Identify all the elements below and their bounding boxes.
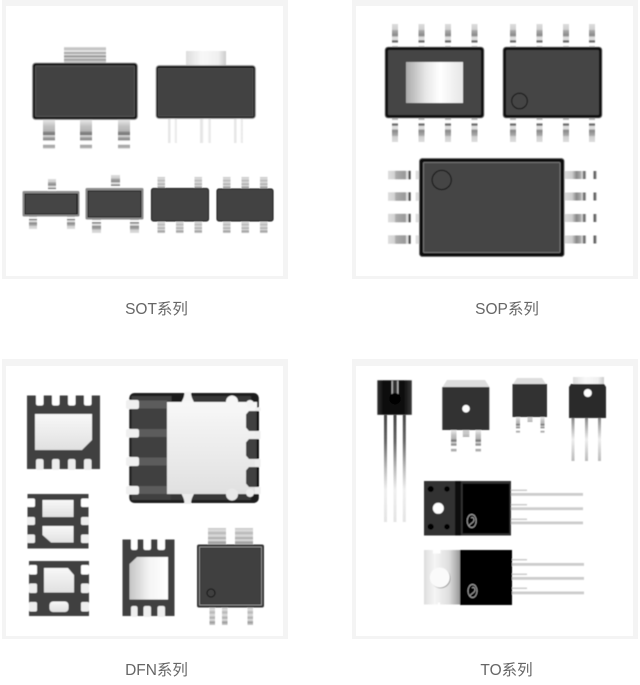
chip: SOT large with cap [156,51,256,143]
panel: TO series [352,359,638,639]
chip: SOT large with tab [32,47,138,149]
chip: SOP with pin marker [503,24,602,142]
chip: SOT five-pin [152,177,208,233]
chip: SOT small three-pin A [22,179,80,229]
label: SOP series: SOP系列 [475,300,539,318]
label: SOT series: SOT系列 [125,300,188,318]
chip: TO-92 with long leads [377,380,412,522]
logo mark [468,584,477,598]
chip: SOT six-pin [217,177,273,233]
chip: DFN eight-lead [27,394,100,470]
chip: DFN six-lead [122,538,174,617]
chip: small package with pins [197,528,264,625]
panel: SOT series [2,0,288,279]
chip: TO-252 large [442,380,490,452]
label: TO series: TO系列 [480,661,533,679]
panel: SOP series [352,0,638,279]
chip: SOT small three-pin B [86,175,144,233]
panel: DFN series [2,359,288,639]
chip: SOP with exposed pad [385,24,484,142]
label: DFN series: DFN系列 [125,661,188,679]
chip: TO-252 small [512,378,547,433]
chip: large SOP with side pins [388,158,597,257]
chip: TO-220 silver tab [424,550,584,606]
chip: DFN dual pad [27,494,89,548]
chip: TO-251 with straight leads [569,377,606,461]
chip: DFN pad and pill [29,561,89,616]
chip: DFN power package [126,392,260,504]
chip: TO-220F dark tab [424,481,583,536]
logo mark [467,514,476,528]
